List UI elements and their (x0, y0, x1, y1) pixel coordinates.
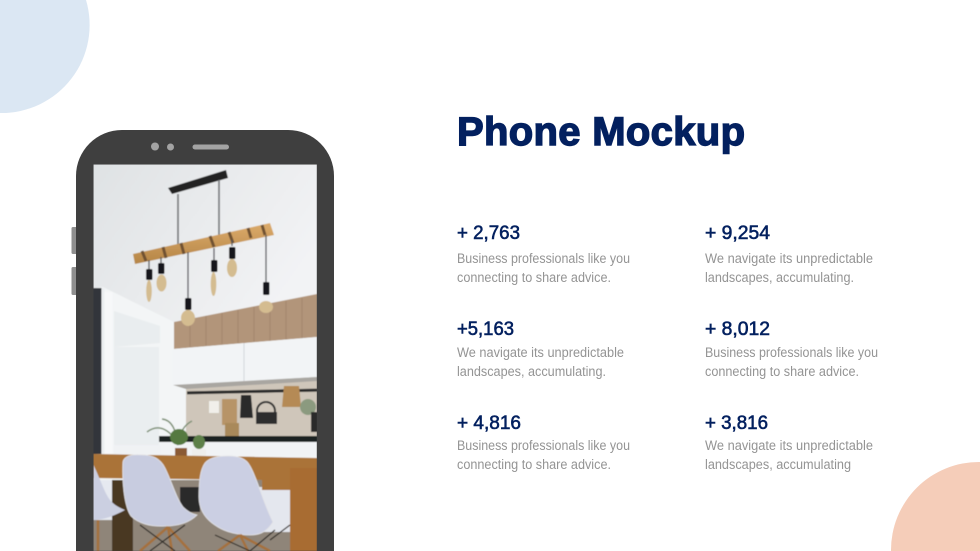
phone screen: kitchen photo (93, 164, 317, 551)
stat: 9,254: + 9,254 (705, 223, 770, 244)
white base wall (94, 286, 317, 481)
stat: 2,763: Business professionals like you (457, 251, 630, 266)
stat: 9,254: landscapes, accumulating. (705, 270, 854, 285)
stat: 3,816: We navigate its unpredictable (705, 438, 873, 453)
stat: 8,012: Business professionals like you (705, 345, 878, 360)
stat: 2,763: + 2,763 (457, 223, 520, 244)
phone camera and speaker (151, 142, 229, 150)
decorative circle: top left (0, 0, 90, 113)
plants (147, 419, 206, 459)
stat: 5,163 (457, 319, 624, 379)
title: Phone Mockup (457, 110, 745, 154)
dining chairs (94, 455, 273, 535)
floor and under-table area (94, 479, 291, 551)
rods (178, 180, 219, 246)
stat: 9,254: We navigate its unpredictable (705, 251, 873, 266)
stat: 8,012 (705, 319, 878, 379)
stat: 8,012: + 8,012 (705, 319, 770, 340)
wooden beam (133, 223, 274, 264)
lower cabinet (160, 442, 317, 456)
rope wraps (142, 225, 265, 261)
stat: 5,163: +5,163 (457, 319, 514, 340)
stat: 5,163: We navigate its unpredictable (457, 345, 624, 360)
stat: 8,012: connecting to share advice. (705, 364, 859, 379)
stat: 4,816: Business professionals like you (457, 438, 630, 453)
pendant lamp (133, 170, 274, 326)
stat: 4,816: + 4,816 (457, 413, 521, 434)
ceiling canopy (168, 170, 228, 194)
left wall and white cabinets (93, 288, 160, 455)
stat: 2,763: connecting to share advice. (457, 270, 611, 285)
bulbs (146, 259, 273, 326)
white upper cabinets (173, 337, 317, 385)
stat: 4,816: connecting to share advice. (457, 457, 611, 472)
phone body (76, 130, 334, 551)
wood wall panel (174, 294, 317, 349)
black countertop (159, 436, 317, 442)
stat: 3,816: landscapes, accumulating (705, 457, 851, 472)
stat: 5,163: landscapes, accumulating. (457, 364, 606, 379)
phone side buttons (72, 227, 78, 295)
ceiling (93, 164, 317, 322)
chair legs (98, 520, 290, 551)
stat: 3,816: + 3,816 (705, 413, 768, 434)
cords (149, 235, 266, 298)
stat: 3,816 (705, 413, 873, 472)
stat: 4,816 (457, 413, 630, 472)
wooden table (93, 454, 317, 551)
stat: 2,763 (457, 223, 630, 285)
stat: 9,254 (705, 223, 873, 285)
sockets (146, 247, 270, 310)
phone mockup (72, 130, 334, 551)
decorative circle: bottom right (891, 462, 980, 551)
backsplash and utensils (173, 377, 317, 438)
